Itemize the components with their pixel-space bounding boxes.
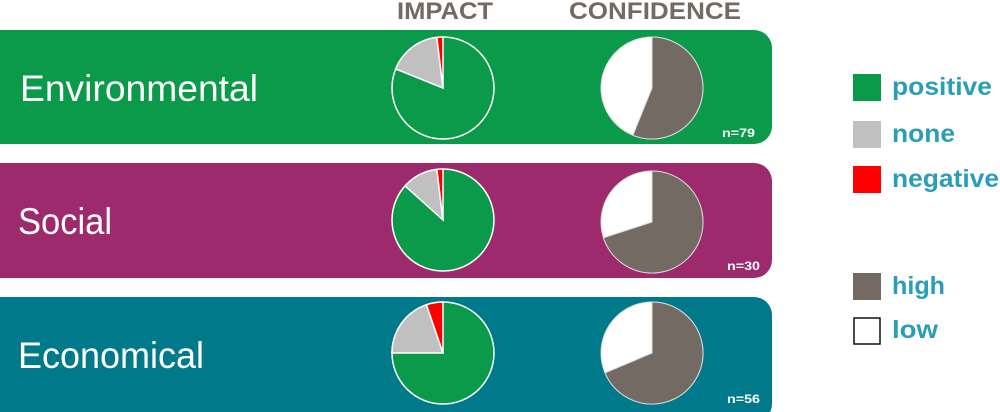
n label: n=56 xyxy=(727,392,760,406)
pie: economical impact xyxy=(392,302,494,404)
legend: negative xyxy=(853,165,999,193)
legend: none xyxy=(853,120,955,148)
legend: low: low xyxy=(892,316,939,344)
legend: low xyxy=(854,316,939,344)
label: social: Social xyxy=(18,201,112,242)
pie: environmental confidence xyxy=(601,37,703,139)
legend: high xyxy=(853,272,945,300)
legend: positive: positive xyxy=(892,73,992,101)
label: economical: Economical xyxy=(18,335,204,376)
pie: social confidence xyxy=(601,171,703,273)
legend: positive xyxy=(853,73,992,101)
pie: economical confidence xyxy=(601,302,703,404)
legend: high: high xyxy=(892,272,945,300)
label: environmental: Environmental xyxy=(20,68,258,109)
legend xyxy=(853,73,999,344)
pie: environmental impact xyxy=(392,37,494,139)
legend: none: none xyxy=(892,120,955,148)
panel: social xyxy=(0,163,772,278)
panel: environmental xyxy=(0,30,772,144)
panel: economical xyxy=(0,297,772,412)
n label: n=79 xyxy=(722,126,755,140)
pie: social impact xyxy=(392,169,494,271)
n label: n=30 xyxy=(727,259,760,273)
legend: negative: negative xyxy=(892,165,999,193)
